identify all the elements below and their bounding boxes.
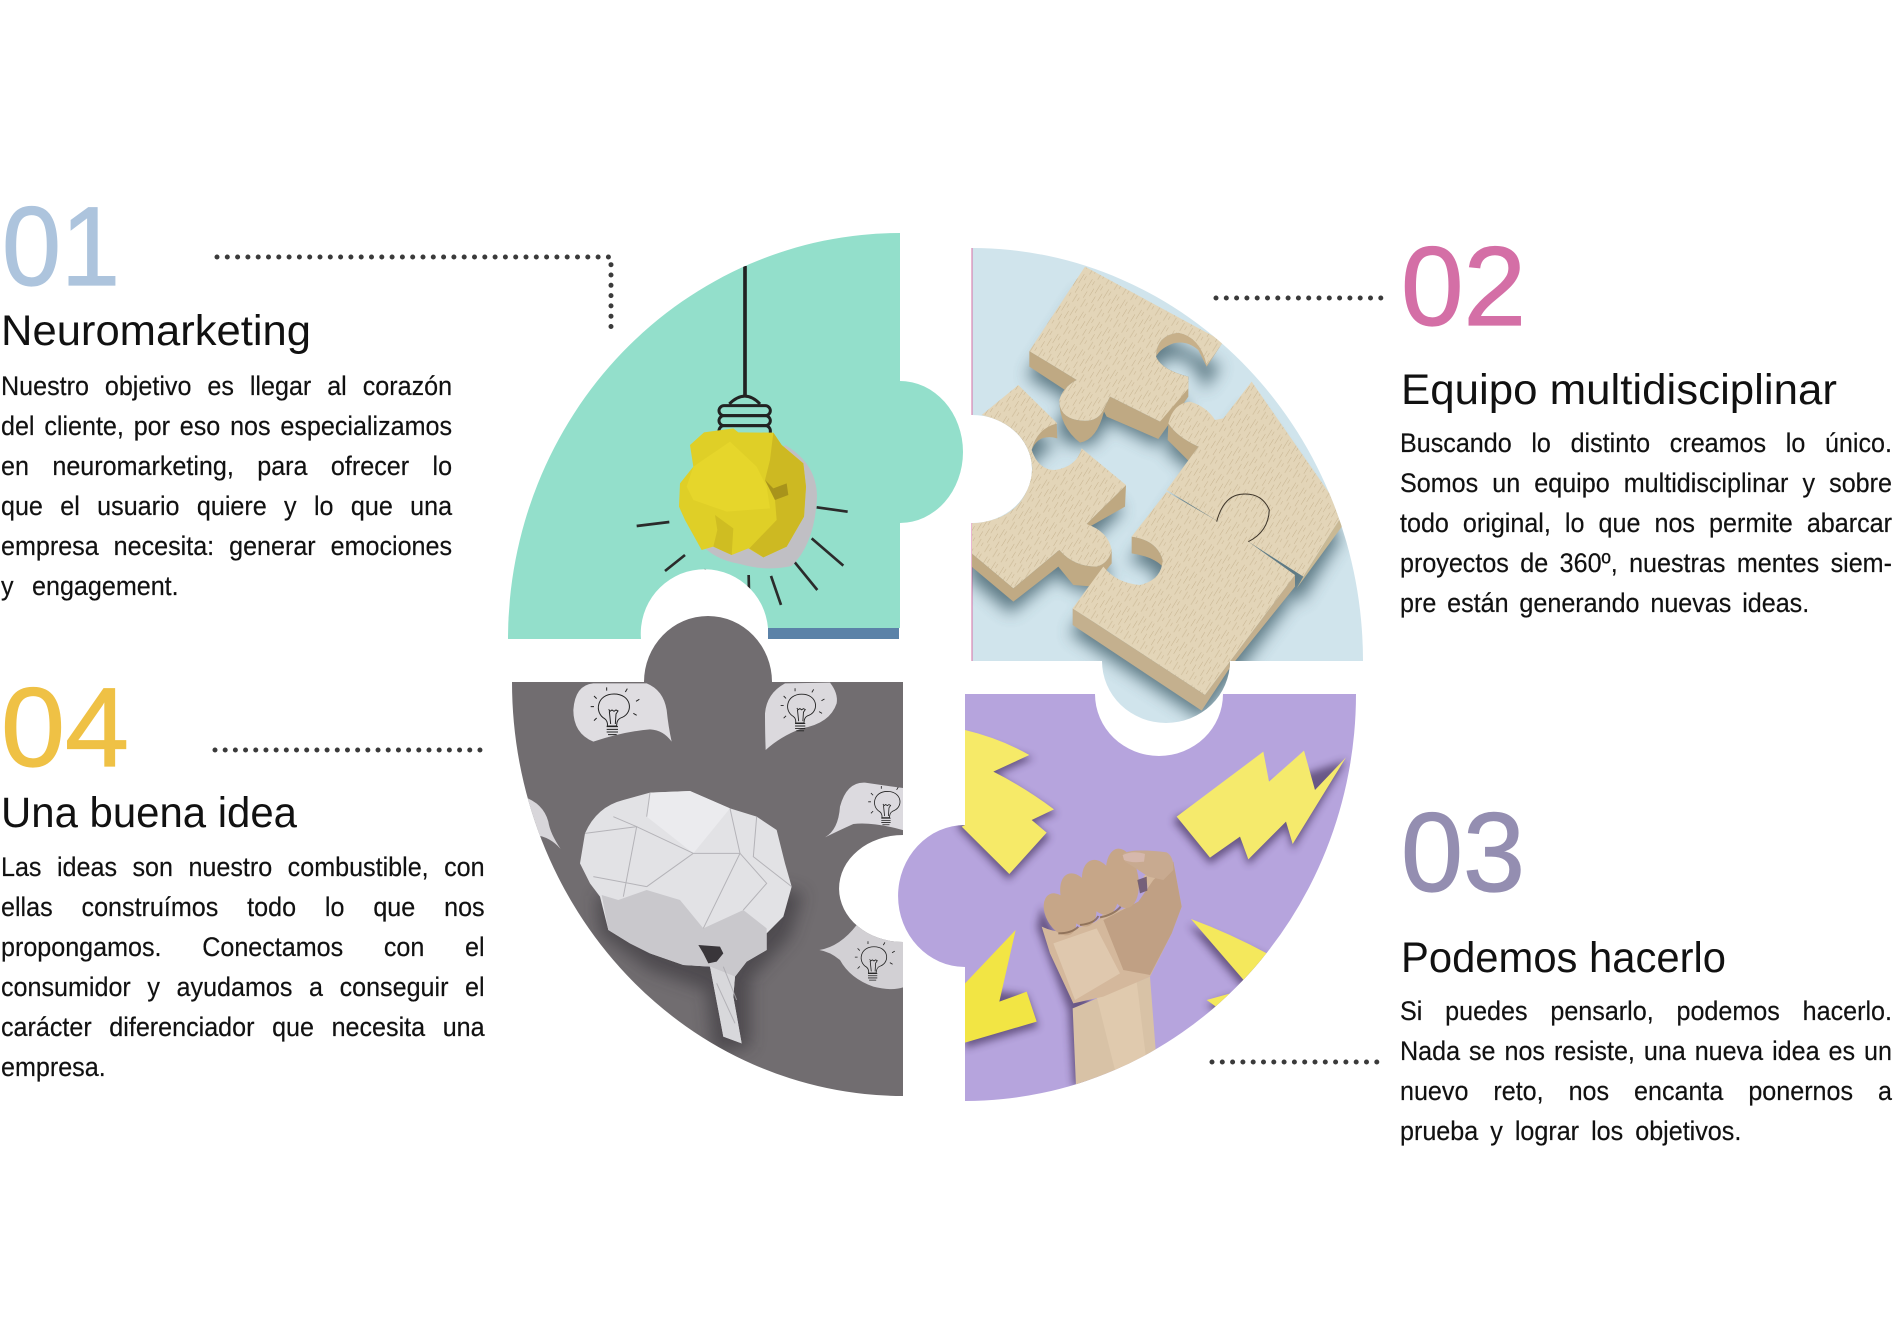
text block: Equipo multidisciplinar: todo original, lo que nos permite abarcar: [1400, 508, 1892, 538]
illustration: yellow lightning shapes and raised fist: [958, 730, 1347, 1087]
text block: Neuromarketing: [1, 371, 452, 601]
paper brain: [580, 791, 792, 1043]
text block: Podemos hacerlo: Si puedes pensarlo, podemos hacerlo.: [1400, 996, 1892, 1026]
blue bar under the mint quadrant: [768, 628, 899, 639]
connector: dotted line 04: [215, 748, 481, 752]
icon: hanging crumpled yellow paper light bulb: [637, 266, 848, 605]
number 01: 01: [2, 184, 120, 309]
heading: Equipo multidisciplinar: Equipo multidisciplinar: [1401, 366, 1837, 414]
connector: dotted line 03: [1212, 1060, 1377, 1064]
heading: Una buena idea: Una buena idea: [1, 789, 297, 837]
text block: Neuromarketing: que el usuario quiere y lo que una: [1, 491, 452, 521]
illustration: four wooden jigsaw pieces: [969, 267, 1347, 720]
text block: Equipo multidisciplinar: Buscando lo distinto creamos lo único.: [1400, 428, 1892, 458]
text block: Una buena idea: [1, 852, 485, 1082]
connector: dotted line 01: [217, 257, 611, 331]
text block: Una buena idea: empresa.: [1, 1052, 106, 1082]
number 03: 03: [1401, 790, 1525, 915]
text block: Neuromarketing: en neuromarketing, para ofrecer lo: [1, 451, 452, 481]
illustration: crumpled paper brain with idea speech bubbles: [523, 683, 908, 1053]
text block: Equipo multidisciplinar: [1400, 428, 1892, 618]
panel: neuromarketing light bulb quadrant: [508, 233, 963, 639]
text block: Neuromarketing: del cliente, por eso nos especializamos: [1, 411, 452, 441]
text block: Una buena idea: Las ideas son nuestro combustible, con: [1, 852, 485, 882]
heading: Neuromarketing: Neuromarketing: [1, 307, 311, 355]
text block: Equipo multidisciplinar: proyectos de 360º, nuestras mentes siem-: [1400, 548, 1892, 578]
text block: Una buena idea: propongamos. Conectamos con el: [1, 932, 485, 962]
text block: Podemos hacerlo: nuevo reto, nos encanta ponernos a: [1400, 1076, 1892, 1106]
connector: dotted line 02: [1216, 296, 1381, 300]
text block: Neuromarketing: y engagement.: [1, 571, 179, 601]
number 02: 02: [1401, 224, 1526, 349]
text block: Una buena idea: consumidor y ayudamos a conseguir el: [1, 972, 485, 1002]
text block: Equipo multidisciplinar: Somos un equipo multidisciplinar y sobre: [1400, 468, 1892, 498]
speech bubble icons: [523, 683, 908, 989]
number 04: 04: [1, 665, 129, 790]
panel: equipo multidisciplinar puzzle quadrant: [969, 248, 1363, 723]
text block: Podemos hacerlo: Nada se nos resiste, una nueva idea es un: [1400, 1036, 1892, 1066]
text block: Neuromarketing: Nuestro objetivo es llegar al corazón: [1, 371, 452, 401]
text block: Podemos hacerlo: [1400, 996, 1892, 1146]
text block: Neuromarketing: empresa necesita: generar emociones: [1, 531, 452, 561]
panel: podemos hacerlo fist quadrant: [898, 694, 1356, 1101]
text block: Equipo multidisciplinar: pre están generando nuevas ideas.: [1400, 588, 1809, 618]
heading: Podemos hacerlo: Podemos hacerlo: [1401, 934, 1726, 982]
text block: Podemos hacerlo: prueba y lograr los objetivos.: [1400, 1116, 1741, 1146]
panel: una buena idea paper brain quadrant: [512, 616, 908, 1096]
text block: Una buena idea: ellas construímos todo lo que nos: [1, 892, 485, 922]
text block: Una buena idea: carácter diferenciador que necesita una: [1, 1012, 485, 1042]
